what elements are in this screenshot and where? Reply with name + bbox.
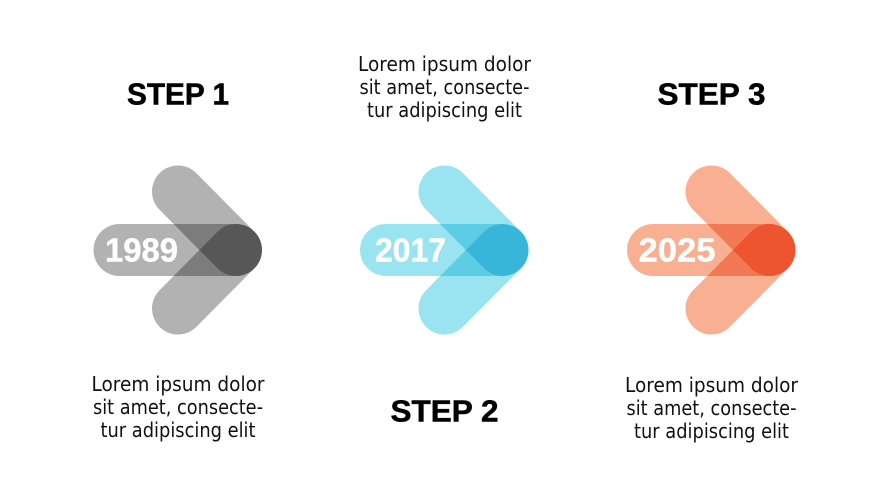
year label: 2025: 2025	[638, 232, 716, 270]
text block: step 3 description: Lorem ipsum dolor	[625, 373, 799, 397]
text block: step 2 description: Lorem ipsum dolor	[358, 52, 532, 76]
heading: step 1: STEP 1	[127, 78, 229, 112]
year label: 1989: 1989	[105, 232, 178, 270]
text block: step 2 description: tur adipiscing elit	[367, 98, 522, 122]
text block: step 1 description: Lorem ipsum dolor	[92, 372, 265, 396]
text block: step 2 description	[358, 52, 532, 122]
text block: step 3 description: tur adipiscing elit	[634, 419, 789, 443]
text block: step 1 description: sit amet, consecte-	[93, 395, 263, 419]
year label: 2017: 2017	[375, 232, 446, 270]
arrow: step 1, 1989	[94, 192, 262, 308]
text block: step 3 description: sit amet, consecte-	[626, 396, 796, 420]
arrow: step 3, 2025	[627, 192, 796, 308]
heading: step 3: STEP 3	[658, 78, 766, 112]
text block: step 1 description: tur adipiscing elit	[100, 418, 256, 442]
text block: step 2 description: sit amet, consecte-	[360, 75, 530, 99]
text block: step 1 description	[92, 372, 265, 442]
heading: step 2: STEP 2	[390, 394, 498, 428]
arrow: step 2, 2017	[360, 192, 528, 308]
text block: step 3 description	[625, 373, 799, 443]
